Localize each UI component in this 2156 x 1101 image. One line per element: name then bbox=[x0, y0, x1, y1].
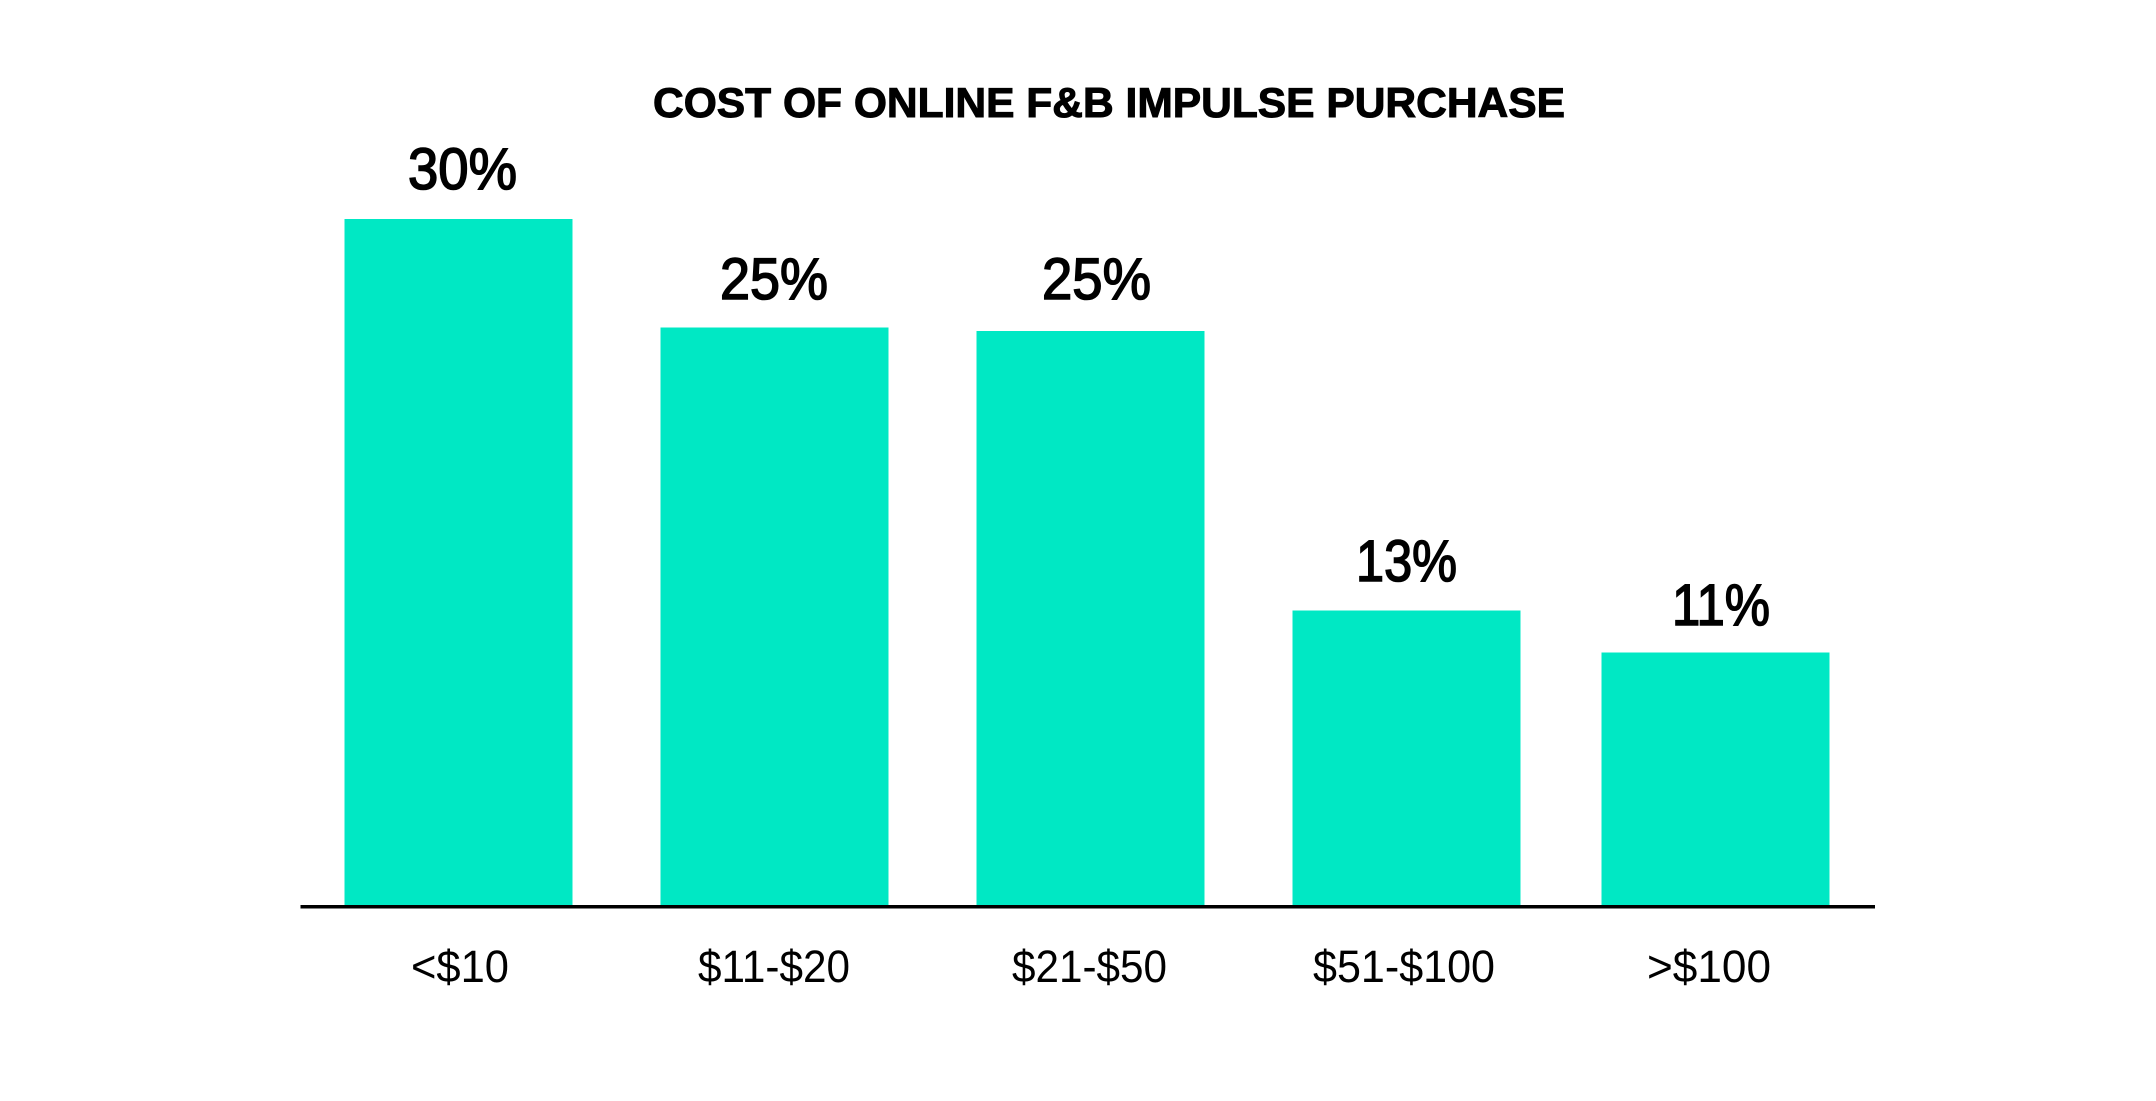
bar: >$100 11%: 11% bbox=[1672, 573, 1770, 638]
x axis line bbox=[300, 905, 1875, 908]
bar: >$100 11%: >$100 bbox=[1647, 941, 1771, 992]
bar: >$100 11% bbox=[1602, 573, 1830, 992]
bar: $51-$100 13% bbox=[1292, 529, 1520, 992]
bar: <$10 30% bbox=[344, 137, 572, 992]
bar: $21-$50 25% bbox=[976, 247, 1204, 992]
bar: <$10 30%: 30% bbox=[408, 137, 517, 202]
bar: $11-$20 25%: 25% bbox=[720, 247, 828, 312]
bar: $21-$50 25%: $21-$50 bbox=[1012, 941, 1167, 992]
title: COST OF ONLINE F&B IMPULSE PURCHASE bbox=[653, 79, 1565, 126]
bar: $51-$100 13%: $51-$100 bbox=[1313, 941, 1495, 992]
bar: $11-$20 25%: $11-$20 bbox=[698, 941, 850, 992]
bar: $11-$20 25% bbox=[660, 247, 888, 992]
bar chart bbox=[300, 137, 1875, 992]
bar: $51-$100 13%: 13% bbox=[1356, 529, 1457, 594]
bar: <$10 30%: <$10 bbox=[411, 941, 509, 992]
bar: $21-$50 25%: 25% bbox=[1042, 247, 1151, 312]
